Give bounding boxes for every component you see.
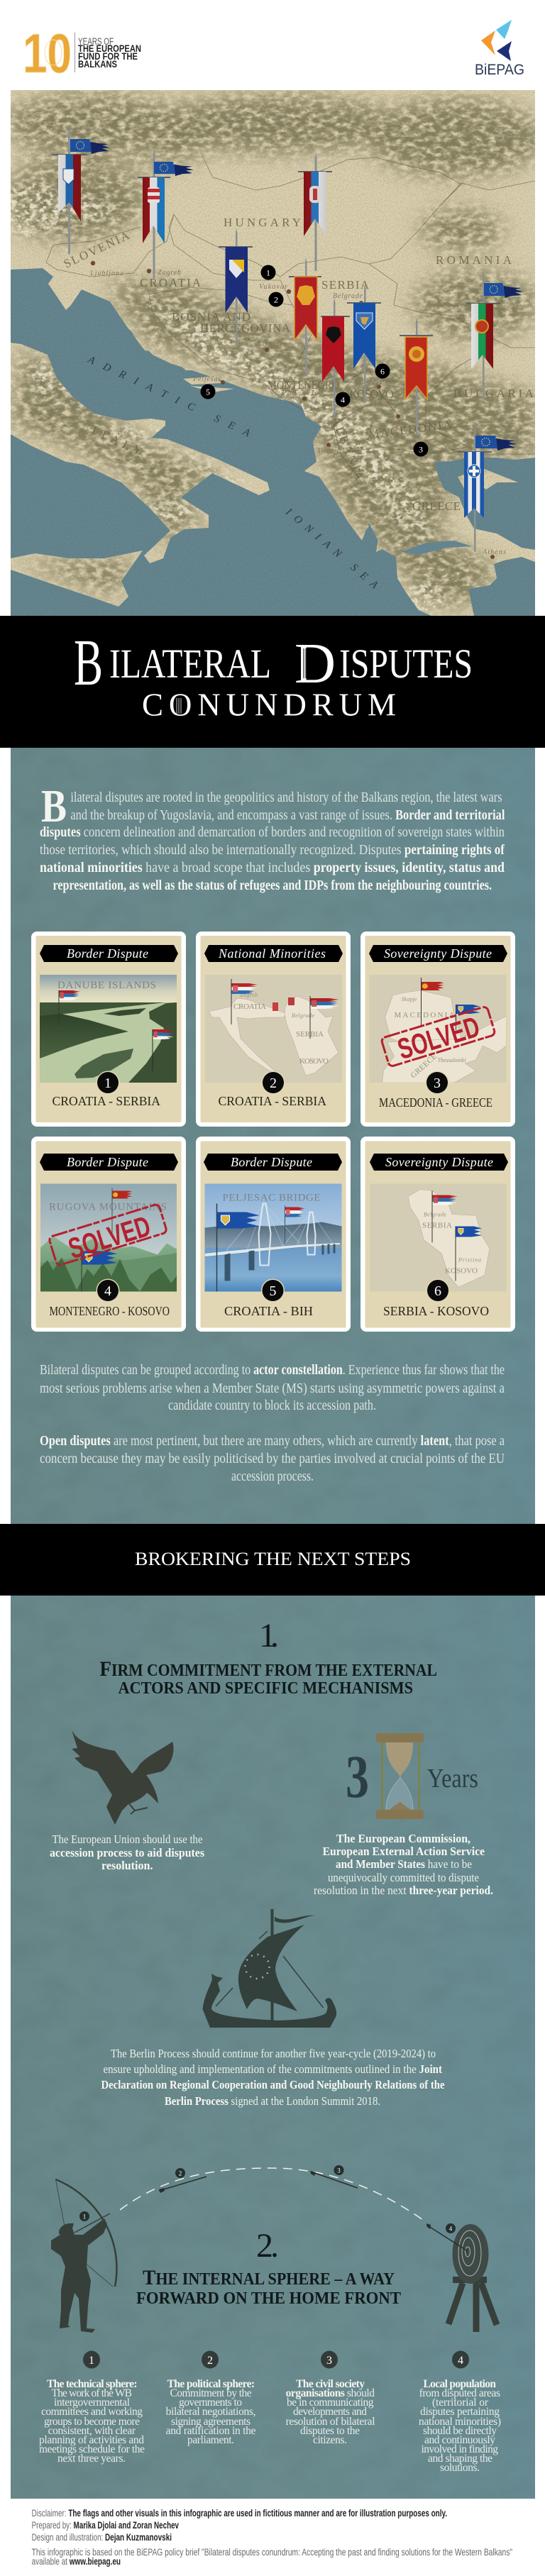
hourglass — [376, 1733, 424, 1819]
illustration: map of Croatia and Serbia: Zagreb — [240, 992, 258, 998]
badge — [83, 2351, 100, 2368]
column 2: political sphere: governments to — [179, 2397, 242, 2409]
card label: CROATIA - BIH — [224, 1304, 313, 1318]
card 5: Croatia - BiH border dispute — [196, 1137, 351, 1332]
column 4: local population — [419, 2351, 501, 2474]
illustration: map of Croatia and Serbia — [205, 975, 342, 1083]
illustration: map of Serbia and Kosovo — [370, 1183, 507, 1291]
heading 2: the internal sphere: 2. — [256, 2227, 279, 2265]
heading 1: firm commitment — [99, 1617, 437, 1698]
number badge on archer: 1 — [83, 2213, 86, 2221]
column 1: technical sphere: consistent, with clear — [48, 2425, 136, 2437]
flag: Bulgaria — [466, 271, 523, 399]
stamp: solved: SOLVED — [394, 1010, 483, 1066]
logo wording: THE EUROPEAN — [78, 43, 141, 54]
text: Berlin Process — [101, 2047, 445, 2108]
illustration: map of Macedonia and Greece: Skopje — [402, 996, 417, 1002]
city markers and names: Skopje — [386, 419, 407, 426]
text: Berlin Process: Berlin Process signed at the London Summit 2018. — [165, 2094, 380, 2108]
logo wording: FUND FOR THE — [78, 51, 138, 62]
intro paragraph: and the breakup of Yugoslavia, and encompass a vast range of issues. Border and territorial — [70, 807, 505, 823]
intro paragraph — [40, 780, 505, 893]
column 3: civil society: organisations should — [286, 2387, 375, 2399]
column 1: technical sphere: groups to become more — [44, 2416, 140, 2428]
column 4: local population: involved in finding — [422, 2443, 498, 2455]
card 3: Macedonia - Greece sovereignty dispute — [360, 932, 515, 1127]
number badge: 2 — [270, 1076, 277, 1091]
city markers and names: Tirana — [317, 447, 338, 455]
heading 1: firm commitment: FIRM COMMITMENT FROM THE EXTERNAL — [99, 1657, 437, 1681]
city markers and names: Pelješac — [192, 375, 222, 383]
illustration: map of Croatia and Serbia: SERBIA — [296, 1030, 324, 1039]
column 4: local population: and shaping the — [428, 2453, 492, 2465]
icon: three years hourglass: 3 — [346, 1742, 369, 1811]
column 1: technical sphere: The work of the WB — [51, 2387, 132, 2399]
illustration: map of Croatia and Serbia: KOSOVO — [299, 1057, 329, 1066]
logo wording: BALKANS — [78, 59, 117, 70]
paragraphs on actor constellation: Bilateral disputes can be grouped according to actor constellation. Experience thus far shows that the — [40, 1362, 505, 1378]
illustration: map of Serbia and Kosovo: SERBIA — [422, 1222, 452, 1230]
badge: 4 — [458, 2355, 463, 2367]
country and sea labels: KOSOVO — [349, 387, 394, 401]
text: European Commission: The European Commission, — [336, 1832, 470, 1845]
text: European Commission — [314, 1832, 493, 1897]
flag: Macedonia — [400, 317, 433, 435]
footer credits: Prepared by: Marika Djolai and Zoran Nechev — [32, 2520, 179, 2531]
city markers and names — [89, 261, 506, 559]
intro paragraph: those territories, which should also be internationally recognized. Disputes pertaining rights of — [40, 842, 505, 858]
illustration: map of Serbia and Kosovo: Pristina — [458, 1257, 481, 1263]
country and sea labels: SLOVENIA — [62, 228, 132, 271]
text: Berlin Process: Declaration on Regional Cooperation and Good Neighbourly Relations of the — [101, 2078, 445, 2091]
sea — [11, 90, 535, 616]
text: European Union: accession process to aid disputes — [50, 1846, 204, 1859]
map number markers: 2 — [274, 295, 278, 305]
illustration: map of Croatia and Serbia: Belgrade — [292, 1012, 314, 1019]
title: Bilateral Disputes — [74, 626, 473, 700]
icon: viking ship with EU sail — [203, 1909, 336, 2028]
illustration: archer — [51, 2179, 116, 2333]
column 2: political sphere: bilateral negotiations, — [166, 2406, 255, 2418]
logo: 10 years of the European Fund for the Balkans — [23, 22, 141, 84]
number badge — [261, 1071, 285, 1094]
drop cap: B — [41, 780, 67, 832]
target with arrow 4: 4 — [449, 2225, 453, 2232]
card 1: Croatia - Serbia border dispute — [31, 932, 186, 1127]
card label: CROATIA - SERBIA — [219, 1094, 326, 1108]
column 3: civil society: developments and — [293, 2406, 367, 2418]
column 2: political sphere: Commitment by the — [170, 2387, 252, 2399]
stamp: solved — [381, 1006, 496, 1070]
card 6: Serbia - Kosovo sovereignty dispute — [360, 1137, 515, 1332]
ribbon: Sovereignty Dispute — [384, 946, 492, 961]
badge — [452, 2351, 469, 2368]
title: Bilateral Disputes: ISPUTES — [339, 641, 473, 687]
city markers and names: Ljubljana — [89, 270, 123, 277]
icon: three years hourglass — [346, 1733, 478, 1819]
column 4: local population: solutions. — [440, 2462, 480, 2474]
flag: Albania — [321, 298, 350, 416]
column 4: local population: (territorial or — [432, 2397, 489, 2409]
illustration: Peljesac bridge — [204, 1183, 342, 1291]
city markers and names: Vukovar — [259, 283, 287, 291]
icon: three years hourglass: Years — [427, 1764, 478, 1793]
heading 2: the internal sphere: FORWARD ON THE HOME FRONT — [136, 2289, 401, 2308]
illustration: map of Macedonia and Greece: MACEDONIA — [395, 1011, 455, 1019]
map number markers: 5 — [206, 387, 210, 397]
map number markers: 4 — [341, 394, 345, 404]
number badge — [426, 1071, 448, 1094]
illustration: Danube islands — [40, 975, 177, 1083]
flag: Kosovo — [347, 284, 381, 403]
ribbon — [204, 1154, 342, 1171]
title: Bilateral Disputes: D — [294, 633, 336, 695]
column 3: civil society: disputes to the — [300, 2425, 360, 2437]
ribbon — [204, 945, 343, 962]
ribbon: Border Dispute — [67, 946, 148, 961]
flag: Serbia — [298, 154, 332, 271]
number badge: 6 — [434, 1283, 441, 1299]
column 1: technical sphere — [39, 2351, 145, 2465]
map number markers — [200, 265, 429, 457]
card label: MACEDONIA - GREECE — [379, 1095, 492, 1110]
column 1: technical sphere: The technical sphere: — [47, 2378, 138, 2390]
map number markers: 1 — [266, 268, 270, 278]
city markers and names: Pristina — [368, 378, 395, 386]
logo number 10: 10 — [23, 22, 72, 84]
logo wording: YEARS OF — [78, 36, 114, 47]
illustration: map of Macedonia and Greece: Thessaloniki — [437, 1057, 466, 1063]
illustration: map of Serbia and Kosovo: KOSOVO — [445, 1267, 478, 1276]
column 3: civil society: citizens. — [313, 2434, 347, 2446]
country and sea labels: HUNGARY — [224, 216, 301, 229]
number badge — [97, 1071, 119, 1094]
illustration: map of Serbia and Kosovo: Belgrade — [424, 1212, 446, 1217]
illustration: Rugova mountains: RUGOVA MOUNTAINS — [49, 1202, 167, 1213]
band: brokering the next steps: BROKERING THE NEXT STEPS — [135, 1549, 411, 1569]
number badge — [426, 1278, 450, 1303]
map number markers: 6 — [380, 366, 385, 376]
number badge: 1 — [104, 1076, 111, 1091]
text: Berlin Process: The Berlin Process should continue for another five year-cycle (2019-2024) to — [111, 2047, 436, 2060]
flag: Croatia — [138, 150, 194, 278]
column 3: civil society: resolution of bilateral — [286, 2416, 375, 2428]
ribbon: Sovereignty Dispute — [385, 1155, 493, 1169]
column 4: local population: should be directly — [423, 2425, 497, 2437]
text: European Commission: and Member States have to be — [336, 1857, 472, 1871]
country and sea labels: ADRIATIC SEA — [85, 354, 252, 440]
column 2: political sphere: The political sphere: — [167, 2378, 255, 2390]
column 1: technical sphere: committees and working — [41, 2406, 143, 2418]
logo: BiEPAG: BiEPAG — [475, 62, 524, 78]
country and sea labels: MONTENEGRO — [268, 378, 339, 392]
city markers and names: Podgorica — [281, 389, 323, 397]
city markers and names: Sarajevo — [257, 340, 287, 348]
illustration: Danube islands: DANUBE ISLANDS — [57, 980, 156, 991]
country and sea labels: IONIAN SEA — [283, 506, 380, 592]
ribbon — [40, 1154, 178, 1171]
paragraphs on actor constellation — [40, 1362, 505, 1484]
logo: BiEPAG — [475, 20, 524, 78]
country borders — [46, 156, 535, 482]
country and sea labels: GREECE — [412, 499, 461, 513]
heading 1: firm commitment: 1. — [259, 1617, 279, 1654]
column 2: political sphere: parliament. — [187, 2434, 234, 2446]
footer credits: Design and illustration: Dejan Kuzmanovski — [32, 2532, 172, 2543]
arrow flight path — [120, 2168, 424, 2221]
column 3: civil society — [286, 2351, 375, 2446]
illustration: map of Macedonia and Greece — [369, 975, 507, 1083]
illustration: Rugova mountains — [40, 1183, 177, 1291]
intro paragraph: national minorities have a broad scope that includes property issues, identity, status and — [40, 860, 505, 875]
text: European Union: The European Union should use the — [53, 1833, 203, 1846]
city markers and names: Belgrade — [333, 292, 363, 300]
stamp: solved — [48, 1204, 168, 1270]
flag: Montenegro — [289, 258, 321, 376]
target with arrow 4 — [426, 2223, 497, 2332]
city markers and names: Zagreb — [158, 269, 181, 277]
number badge — [261, 1278, 285, 1303]
column 1: technical sphere: intergovernmental — [54, 2397, 130, 2409]
heading 1: firm commitment: ACTORS AND SPECIFIC MECHANISMS — [118, 1679, 413, 1698]
footer credits — [32, 2508, 512, 2567]
stamp: solved: SOLVED — [65, 1210, 154, 1265]
column 4: local population: from disputed areas — [419, 2387, 500, 2399]
map of the Western Balkans — [0, 90, 543, 616]
icon: raven — [71, 1729, 174, 1825]
text: European Commission: unequivocally committed to dispute — [328, 1871, 479, 1884]
country and sea labels: SERBIA — [321, 278, 370, 292]
number badge: 5 — [270, 1283, 277, 1299]
country and sea labels: CROATIA — [140, 276, 202, 289]
column 2: political sphere: and ratification in the — [166, 2425, 256, 2437]
country and sea labels: HERCEGOVINA — [200, 321, 291, 335]
card label: SERBIA - KOSOVO — [383, 1304, 489, 1318]
map number markers: 3 — [419, 444, 423, 454]
heading 2: the internal sphere — [136, 2227, 401, 2308]
country and sea labels: BULGARIA — [453, 387, 534, 400]
logo wording — [78, 36, 141, 70]
column 3: civil society: be in communicating — [287, 2397, 374, 2409]
illustration: map of Macedonia and Greece: GREECE — [409, 1052, 439, 1080]
land relief — [0, 90, 543, 616]
country and sea labels: ALBANIA — [329, 414, 367, 482]
column 1: technical sphere: planning of activities and — [39, 2434, 144, 2446]
column 2: political sphere: signing agreements — [171, 2416, 251, 2428]
arrow 3: 3 — [337, 2167, 341, 2174]
country and sea labels — [62, 216, 534, 592]
country and sea labels: ROMANIA — [436, 253, 512, 267]
textured teal panel — [11, 748, 535, 2499]
badge: 1 — [89, 2355, 94, 2367]
arrow 3 — [310, 2165, 358, 2188]
city markers and names: Athens — [482, 548, 506, 556]
paragraphs on actor constellation: candidate country to block its accession path. — [168, 1398, 376, 1413]
illustration: map of Croatia and Serbia: CROATIA — [233, 1002, 266, 1011]
text: European Commission: resolution in the next three-year period. — [314, 1884, 493, 1897]
dark shadows: gulf of Corinth — [401, 541, 472, 555]
title: Conundrum: CONUNDRUM — [142, 687, 396, 722]
flag: Greece — [457, 425, 517, 552]
logo number 10: 10 — [23, 22, 72, 84]
column 3: civil society: The civil society — [296, 2378, 365, 2390]
ribbon: National Minorities — [218, 946, 326, 961]
country and sea labels: ITALY — [89, 423, 144, 458]
footer credits: available at www.biepag.eu — [32, 2556, 121, 2567]
card 4: Montenegro - Kosovo border dispute — [31, 1137, 186, 1332]
title band — [0, 616, 545, 748]
badge: 3 — [326, 2355, 332, 2367]
title: Bilateral Disputes: ILATERAL — [109, 641, 271, 687]
ribbon — [369, 945, 507, 962]
paragraphs on actor constellation: accession process. — [231, 1469, 314, 1484]
text: European Union — [50, 1833, 204, 1872]
text: European Union: resolution. — [101, 1859, 153, 1872]
column 1: technical sphere: next three years. — [57, 2453, 126, 2465]
country and sea labels: BOSNIA AND — [172, 310, 251, 324]
card 2: Croatia - Serbia national minorities — [196, 932, 351, 1127]
band: brokering the next steps — [0, 1524, 545, 1596]
flag: Slovenia — [52, 126, 110, 254]
ribbon — [40, 945, 178, 962]
column 2: political sphere — [166, 2351, 256, 2446]
column 4: local population: Local population — [423, 2378, 496, 2390]
illustration: Peljesac bridge: PELJESAC BRIDGE — [223, 1192, 321, 1203]
number badge on archer — [79, 2211, 89, 2221]
number badge — [97, 1278, 119, 1303]
number badge: 3 — [434, 1076, 441, 1091]
column 4: local population: national minorities) — [419, 2416, 501, 2428]
heading 2: the internal sphere: THE INTERNAL SPHERE – A WAY — [143, 2266, 395, 2289]
paragraphs on actor constellation: Open disputes are most pertinent, but there are many others, which are currently latent, that pose a — [40, 1433, 505, 1449]
text: Berlin Process: ensure upholding and implementation of the commitments outlined in the Joint — [104, 2062, 442, 2076]
country and sea labels: MACEDONIA — [368, 418, 453, 441]
arrow 2: 2 — [179, 2169, 182, 2177]
ribbon: Border Dispute — [231, 1155, 312, 1169]
ribbon: Border Dispute — [67, 1155, 148, 1169]
title: Bilateral Disputes: B — [74, 626, 103, 700]
number badge: 4 — [104, 1283, 111, 1299]
card label: CROATIA - SERBIA — [53, 1094, 160, 1108]
card label: MONTENEGRO - KOSOVO — [50, 1304, 170, 1318]
flag: Bosnia and Herzegovina — [219, 228, 253, 347]
arrow 2 — [159, 2168, 207, 2193]
column 1: technical sphere: meetings schedule for the — [39, 2443, 145, 2455]
column 4: local population: disputes pertaining — [420, 2406, 500, 2418]
ribbon — [370, 1154, 508, 1171]
column 4: local population: and continuously — [424, 2434, 495, 2446]
badge: 2 — [207, 2355, 213, 2367]
text: European Commission: European External Action Service — [323, 1845, 485, 1858]
